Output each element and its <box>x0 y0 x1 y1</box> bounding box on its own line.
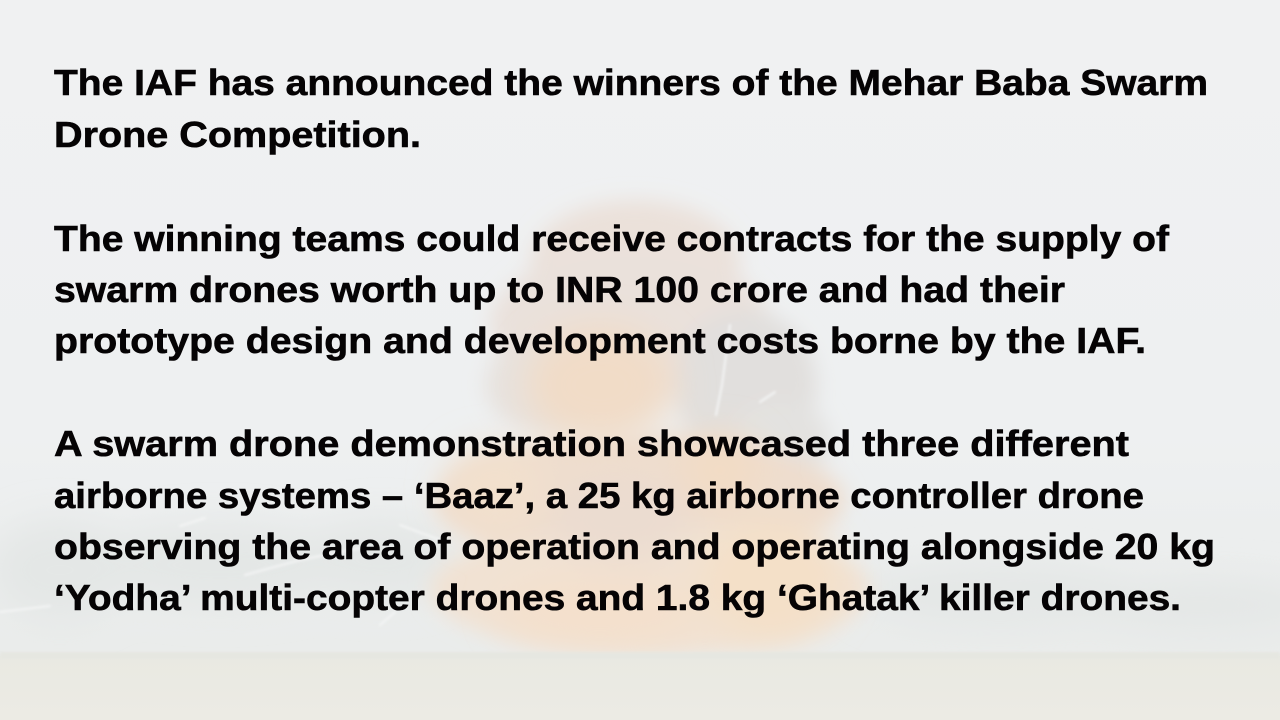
text block: competition winners: The IAF has announced the winners of the Mehar Baba Swarm <box>54 62 1208 103</box>
text block: contracts and costs: prototype design and development costs borne by the IAF. <box>54 320 1146 361</box>
text block: competition winners <box>54 62 1208 155</box>
fireball <box>445 325 840 642</box>
text block: swarm demonstration: airborne systems – ‘Baaz’, a 25 kg airborne controller drone <box>54 475 1144 516</box>
text block: swarm demonstration: ‘Yodha’ multi-copter drones and 1.8 kg ‘Ghatak’ killer drones. <box>54 577 1181 618</box>
text block: swarm demonstration: observing the area of operation and operating alongside 20 kg <box>54 526 1215 567</box>
debris streaks <box>0 325 775 625</box>
text block: competition winners: Drone Competition. <box>54 114 421 155</box>
text block: contracts and costs: swarm drones worth up to INR 100 crore and had their <box>54 269 1065 310</box>
tree line <box>0 520 1280 630</box>
ground <box>0 656 1280 720</box>
text block: contracts and costs <box>54 218 1170 361</box>
text block: swarm demonstration: A swarm drone demonstration showcased three different <box>54 423 1129 464</box>
text block: contracts and costs: The winning teams could receive contracts for the supply of <box>54 218 1170 259</box>
smoke <box>430 200 870 655</box>
text block: swarm demonstration <box>54 423 1215 618</box>
